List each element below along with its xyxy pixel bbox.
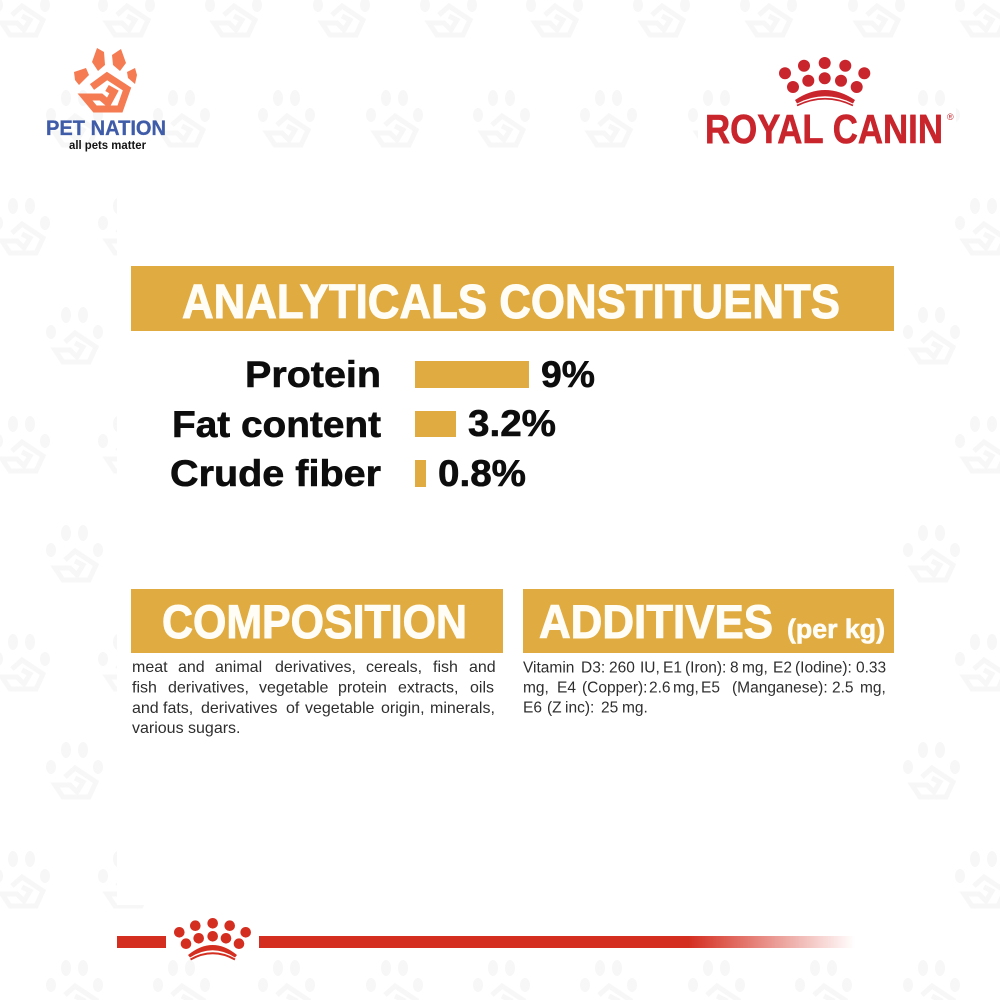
body text: of — [286, 700, 300, 717]
logo: Royal Canin — [705, 57, 954, 152]
row: fat content: Fat content — [172, 404, 381, 445]
panel: composition — [131, 589, 503, 737]
body text: various sugars. — [132, 720, 240, 737]
body text: E2 — [773, 660, 792, 676]
row: crude fiber: 0.8% — [438, 453, 526, 494]
footer: red bar with crown — [117, 918, 855, 960]
body text: fish — [132, 680, 157, 696]
row: crude fiber: Crude fiber — [170, 453, 381, 494]
icon: crown — [779, 57, 870, 106]
body text: Vitamin — [523, 660, 574, 676]
body text: 0.33 — [856, 660, 886, 676]
brand name: ROYAL CANIN — [705, 106, 943, 152]
body text: D3: — [581, 660, 605, 676]
body text: animal — [215, 659, 262, 676]
body text: derivatives — [201, 700, 277, 717]
body text — [132, 659, 496, 737]
row: fat content — [172, 403, 556, 445]
heading band — [131, 266, 894, 331]
icon: crown — [174, 918, 251, 960]
heading unit: (per kg) — [787, 614, 885, 644]
registered mark: ® — [947, 112, 954, 122]
body text: oils — [470, 680, 494, 696]
body text: extracts, — [398, 680, 458, 696]
tagline: all pets matter — [69, 138, 146, 152]
body text: 25 — [601, 700, 618, 716]
body text: 2.6 — [649, 680, 671, 696]
body text: mg, — [860, 680, 886, 696]
body text: (Copper): — [582, 680, 647, 696]
body text: derivatives, — [275, 659, 356, 676]
row: fat content: 3.2% — [468, 403, 556, 444]
body text: and — [132, 700, 159, 717]
body text: (Manganese): — [732, 680, 828, 696]
heading: COMPOSITION — [162, 595, 467, 648]
body text: 2.5 — [832, 680, 854, 696]
logo: Pet Nation — [46, 48, 166, 152]
body text: meat — [132, 659, 168, 676]
body text: inc): — [565, 700, 594, 716]
brand name: PET NATION — [46, 117, 166, 140]
heading: ADDITIVES — [539, 595, 773, 648]
body text: E1 — [663, 660, 682, 676]
body text: 260 — [609, 660, 635, 676]
row: protein: Protein — [245, 354, 381, 395]
body text: mg, — [523, 680, 549, 696]
body text: E5 — [701, 680, 720, 696]
row: crude fiber — [170, 453, 526, 494]
body text: E6 — [523, 700, 542, 716]
body text: vegetable — [305, 700, 374, 717]
panel: analyticals constituents — [131, 266, 894, 494]
body text: mg, — [673, 680, 699, 696]
body text: (Z — [547, 700, 562, 716]
body text: derivatives, — [168, 680, 249, 696]
body text: protein — [338, 680, 387, 696]
panel: additives — [523, 589, 894, 716]
body text — [523, 660, 886, 716]
icon: orange paw — [74, 48, 137, 109]
body text: origin, — [381, 700, 425, 717]
body text: mg, — [742, 660, 768, 676]
body text: fats, — [163, 700, 193, 717]
body text: mg. — [622, 700, 648, 716]
body text: and — [469, 659, 496, 676]
body text: cereals, — [366, 659, 422, 676]
body text: and — [178, 659, 205, 676]
heading band — [131, 589, 503, 653]
heading: ANALYTICALS CONSTITUENTS — [182, 276, 840, 329]
heading band — [523, 589, 894, 653]
body text: fish — [433, 659, 458, 676]
body text: vegetable — [259, 680, 328, 696]
row: protein — [245, 354, 595, 395]
right bar — [259, 936, 855, 948]
body text: (Iodine): — [795, 660, 852, 676]
body text: E4 — [557, 680, 576, 696]
body text: 8 — [730, 660, 739, 676]
body text: minerals, — [430, 700, 495, 717]
body text: (Iron): — [685, 660, 726, 676]
left bar — [117, 936, 166, 948]
row: protein: 9% — [541, 354, 595, 395]
body text: IU, — [640, 660, 660, 676]
